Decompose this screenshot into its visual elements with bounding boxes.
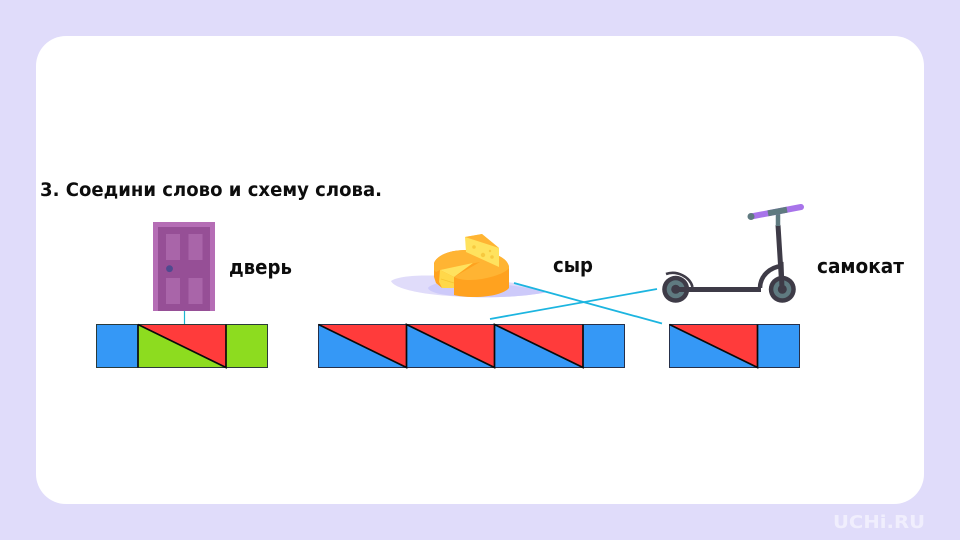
word: сыр: сыр (553, 253, 593, 277)
word: самокат: самокат (817, 254, 904, 278)
scheme: door word (96, 324, 268, 368)
arrow: door to scheme line (184, 311, 186, 324)
scheme: cheese word (670, 324, 800, 368)
icon: door (153, 222, 215, 311)
arrow: cheese to scooter scheme line (514, 283, 662, 324)
scheme: scooter word long (318, 324, 624, 368)
arrow: scooter to long scheme line (490, 289, 657, 319)
icon: scooter (662, 207, 801, 303)
logo: UCHi.RU: UCHi.RU (833, 512, 925, 533)
word: дверь: дверь (229, 255, 292, 279)
heading: task: 3. Соедини слово и схему слова. (40, 179, 382, 201)
icon: cheese (391, 234, 547, 297)
